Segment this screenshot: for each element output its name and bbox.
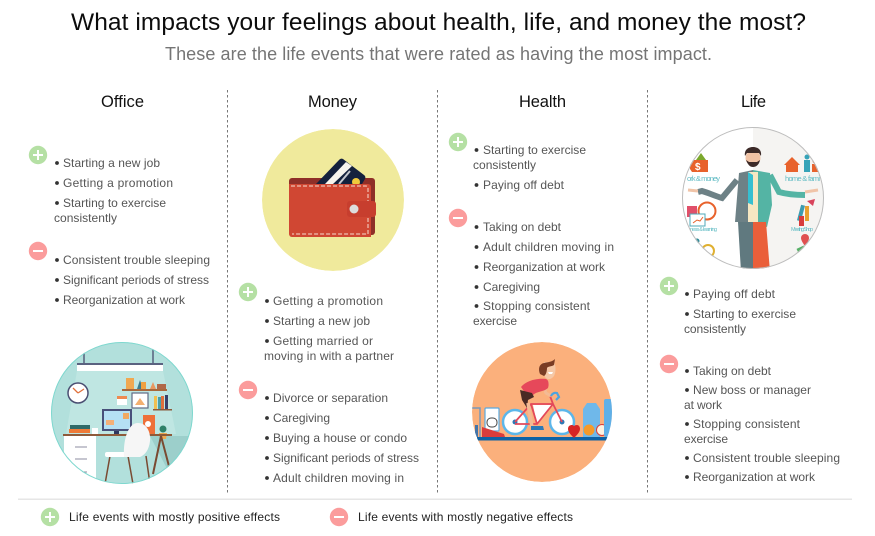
negative list: Money: Adult children moving in (273, 471, 404, 485)
positive list: Office: Starting to exercise (63, 196, 166, 210)
positive list: Office: Getting a promotion (63, 176, 173, 190)
negative list: Life: Stopping consistent (693, 417, 801, 431)
negative list: Life: New boss or manager (693, 383, 811, 397)
positive list: Health: Starting to exercise (483, 143, 586, 157)
negative list: Health: Taking on debt (483, 220, 562, 234)
panel: Life (660, 93, 840, 484)
positive list: Money: Getting a promotion (273, 294, 383, 308)
negative list: Money: Divorce or separation (273, 391, 388, 405)
negative list: Health: exercise (473, 314, 517, 328)
icon: plus (660, 277, 678, 295)
negative list: Health: Stopping consistent (483, 299, 591, 313)
positive list: Office (54, 156, 173, 225)
positive list: Money: Getting married or (273, 334, 373, 348)
negative list: Life: Taking on debt (693, 364, 772, 378)
icon: minus (239, 381, 257, 399)
negative list: Life: Consistent trouble sleeping (693, 451, 840, 465)
negative list: Money: Significant periods of stress (273, 451, 419, 465)
negative list: Money: Caregiving (273, 411, 330, 425)
heading: Life: Life (741, 93, 766, 111)
legend (41, 508, 573, 526)
negative list: Money: Buying a house or condo (273, 431, 407, 445)
illustration ring: life (682, 128, 824, 268)
illustration: office desk (51, 342, 193, 486)
illustration: man balancing work and home: ork & money (687, 174, 720, 183)
negative list: Health (473, 220, 614, 328)
positive list: Health (473, 143, 586, 192)
subtitle: These are the life events that were rated as having the most impact. (165, 44, 712, 64)
negative list: Office: Significant periods of stress (63, 273, 209, 287)
icon: minus (660, 355, 678, 373)
positive list: Money: Starting a new job (273, 314, 370, 328)
illustration: wallet (262, 129, 404, 271)
illustration: man balancing work and home: ness & learning (690, 227, 717, 233)
negative list: Office (55, 253, 210, 307)
illustration: man balancing work and home: $ (695, 162, 701, 173)
icon: minus (449, 209, 467, 227)
panel: Health (449, 93, 614, 482)
positive list: Money (264, 294, 394, 363)
heading: Office: Office (101, 93, 144, 111)
legend text: negative: Life events with mostly negative effects (358, 510, 573, 524)
icon: legend minus (330, 508, 348, 526)
title: What impacts your feelings about health, life, and money the most? (71, 9, 806, 36)
negative list: Office: Reorganization at work (63, 293, 186, 307)
icon: plus (29, 146, 47, 164)
positive list: Office: Starting a new job (63, 156, 160, 170)
icon: plus (449, 133, 467, 151)
positive list: Health: Paying off debt (483, 178, 565, 192)
illustration: man balancing work and home: home & fami (785, 174, 820, 183)
positive list: Money: moving in with a partner (264, 349, 394, 363)
negative list: Office: Consistent trouble sleeping (63, 253, 210, 267)
negative list: Life: exercise (684, 432, 728, 446)
positive list: Life: Paying off debt (693, 287, 776, 301)
illustration: man balancing work and home (682, 127, 824, 272)
positive list: Life: Starting to exercise (693, 307, 796, 321)
positive list: Office: consistently (54, 211, 117, 225)
heading: Health: Health (519, 93, 566, 111)
negative list: Health: Reorganization at work (483, 260, 606, 274)
illustration ring: office (52, 342, 192, 484)
positive list: Life (684, 287, 796, 336)
icon: legend plus (41, 508, 59, 526)
icon: minus (29, 242, 47, 260)
icon: plus (239, 283, 257, 301)
negative list: Health: Caregiving (483, 280, 540, 294)
positive list: Life: consistently (684, 322, 746, 336)
illustration: man balancing work and home: Meeting Shop (791, 227, 813, 233)
panel: Office (29, 93, 210, 486)
heading: Money: Money (308, 93, 358, 111)
negative list: Life: Reorganization at work (693, 470, 816, 484)
negative list: Money (265, 391, 419, 485)
negative list: Life: at work (684, 398, 723, 412)
negative list: Health: Adult children moving in (483, 240, 614, 254)
negative list: Life (684, 364, 840, 484)
illustration: cyclist (472, 342, 613, 482)
panel: Money (239, 93, 419, 485)
positive list: Health: consistently (473, 158, 536, 172)
legend text: positive: Life events with mostly positive effects (69, 510, 280, 524)
